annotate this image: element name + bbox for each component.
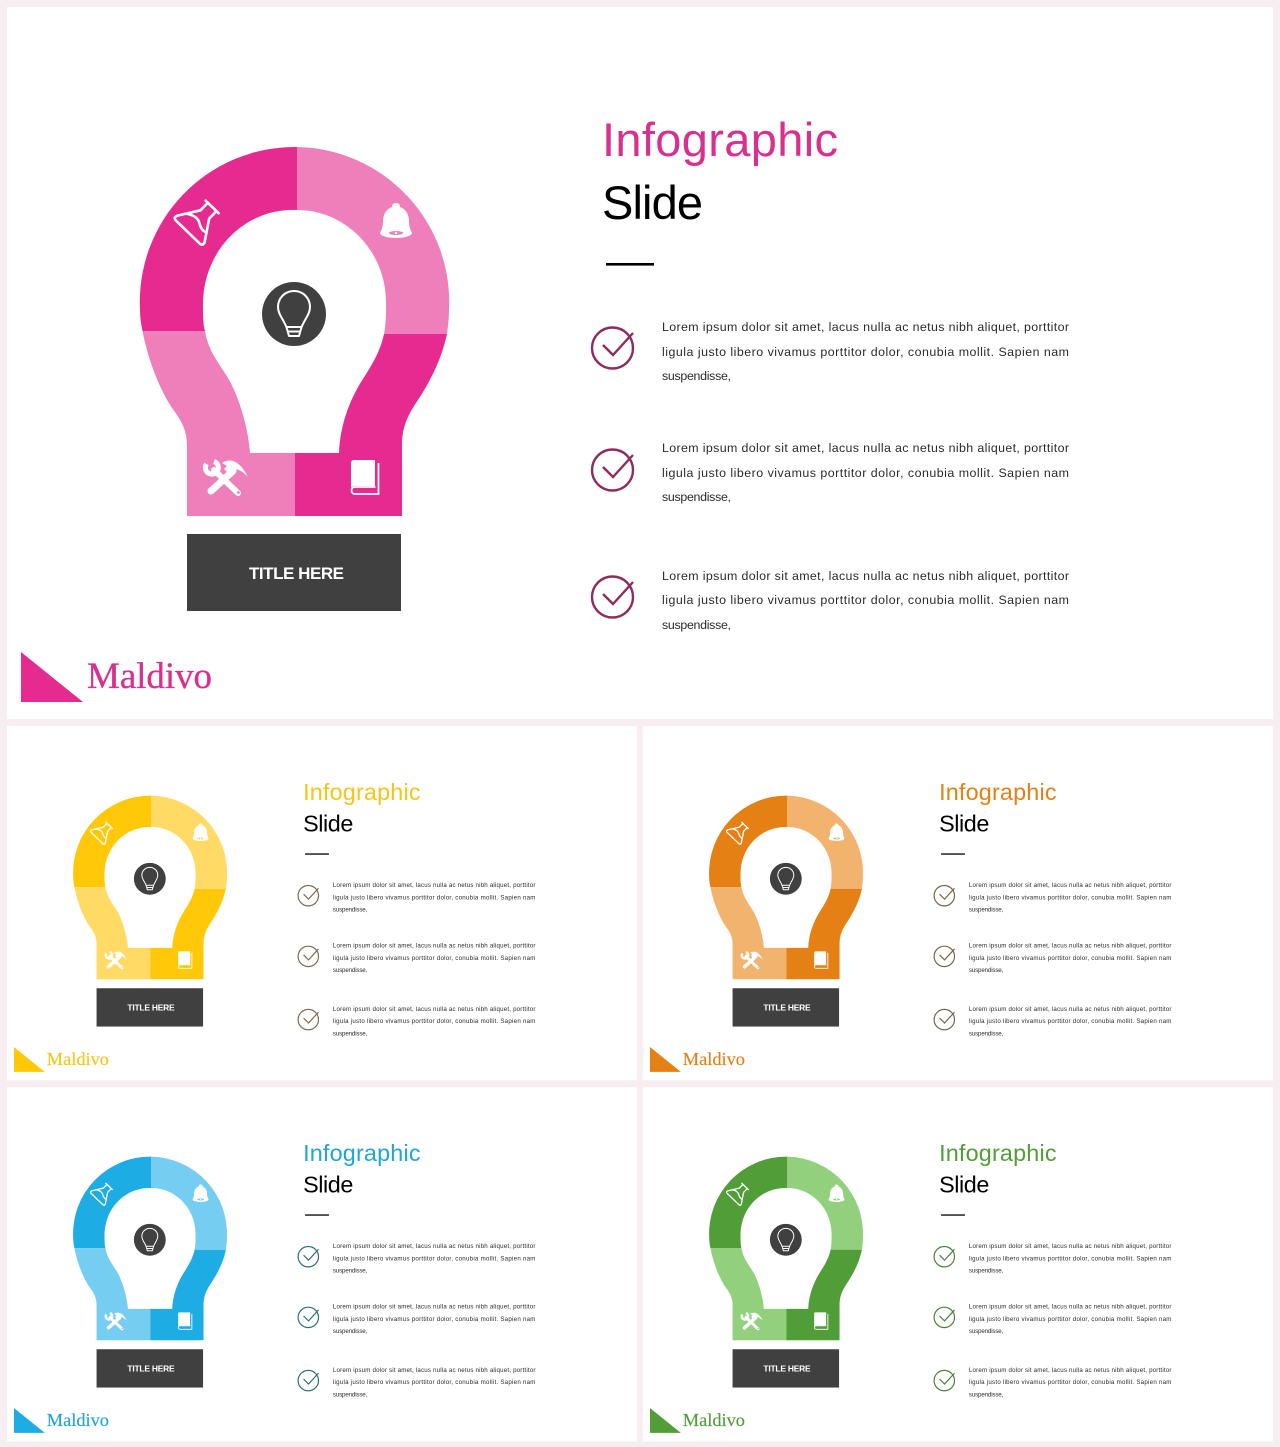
list item 3 [592, 569, 1069, 632]
heading rule [941, 1214, 965, 1216]
list item 3 [298, 1367, 535, 1399]
list item 1 [592, 320, 1069, 383]
heading: Slide: Slide [303, 810, 353, 836]
list item 3: suspendisse, [969, 1392, 1004, 1399]
list item 1 [934, 882, 1171, 914]
heading: Infographic: Infographic [939, 1140, 1057, 1166]
list item 1: suspendisse, [333, 907, 368, 914]
list item 3: suspendisse, [333, 1392, 368, 1399]
segment: bottom left [74, 887, 150, 979]
list item 2: ligula justo libero vivamus porttitor dolor, conubia mollit. Sapien nam [333, 955, 535, 962]
title box [187, 534, 401, 611]
segment: bottom left [142, 331, 295, 516]
list item 2: ligula justo libero vivamus porttitor dolor, conubia mollit. Sapien nam [969, 955, 1171, 962]
list item 1: suspendisse, [662, 369, 731, 383]
panel: yellow slide [7, 726, 637, 1080]
list item 3: ligula justo libero vivamus porttitor dolor, conubia mollit. Sapien nam [333, 1018, 535, 1025]
list item 1: suspendisse, [969, 1268, 1004, 1275]
list item 3 [298, 1006, 535, 1038]
bulb diagram [73, 796, 227, 979]
list item 1: ligula justo libero vivamus porttitor dolor, conubia mollit. Sapien nam [333, 895, 535, 902]
icon: flask [90, 819, 116, 845]
center circle [770, 1224, 802, 1256]
list item 1: Lorem ipsum dolor sit amet, lacus nulla ac netus nibh aliquet, porttitor [333, 882, 535, 889]
title box: TITLE HERE [763, 1003, 811, 1013]
list item 3: Lorem ipsum dolor sit amet, lacus nulla ac netus nibh aliquet, porttitor [662, 569, 1069, 583]
icon: flask [174, 193, 226, 246]
icon: tools [742, 952, 763, 968]
list item 1: Lorem ipsum dolor sit amet, lacus nulla ac netus nibh aliquet, porttitor [662, 320, 1069, 334]
title box [733, 1349, 839, 1388]
icon: bell [829, 824, 845, 841]
segment: bottom left [710, 887, 786, 979]
title box: TITLE HERE [249, 564, 344, 583]
list item 1: suspendisse, [333, 1268, 368, 1275]
icon: bell [380, 203, 412, 238]
list item 2: Lorem ipsum dolor sit amet, lacus nulla ac netus nibh aliquet, porttitor [969, 942, 1171, 949]
list item 3: suspendisse, [333, 1031, 368, 1038]
list item 2: suspendisse, [662, 490, 731, 504]
center circle [134, 863, 166, 895]
list item 3: Lorem ipsum dolor sit amet, lacus nulla ac netus nibh aliquet, porttitor [333, 1367, 535, 1374]
list item 3: Lorem ipsum dolor sit amet, lacus nulla ac netus nibh aliquet, porttitor [969, 1367, 1171, 1374]
segment: top right [151, 1157, 227, 1250]
list item 3: suspendisse, [662, 618, 731, 632]
center circle [770, 863, 802, 895]
list item 3: Lorem ipsum dolor sit amet, lacus nulla ac netus nibh aliquet, porttitor [333, 1006, 535, 1013]
logo [650, 1408, 745, 1433]
segment: top left [709, 796, 787, 887]
list item 2 [298, 1303, 535, 1335]
heading: Infographic: Infographic [303, 779, 421, 805]
segment: bottom right [295, 334, 447, 516]
logo [21, 652, 212, 702]
logo: Maldivo [683, 1410, 745, 1430]
icon: bell [829, 1185, 845, 1202]
icon: flask [90, 1180, 116, 1206]
segment: bottom left [710, 1248, 786, 1340]
title box: TITLE HERE [127, 1003, 175, 1013]
icon: book [178, 1312, 192, 1329]
list item 2: Lorem ipsum dolor sit amet, lacus nulla ac netus nibh aliquet, porttitor [969, 1303, 1171, 1310]
icon: book [351, 460, 378, 494]
logo [14, 1408, 109, 1433]
icon: flask [726, 1180, 752, 1206]
list item 1: Lorem ipsum dolor sit amet, lacus nulla ac netus nibh aliquet, porttitor [333, 1243, 535, 1250]
list item 2: suspendisse, [969, 967, 1004, 974]
list item 1 [298, 1243, 535, 1275]
center circle [134, 1224, 166, 1256]
segment: top right [787, 796, 863, 889]
icon: book [814, 1312, 828, 1329]
list item 2: ligula justo libero vivamus porttitor dolor, conubia mollit. Sapien nam [333, 1316, 535, 1323]
heading rule [305, 853, 329, 855]
logo: Maldivo [87, 656, 212, 697]
icon: book [178, 951, 192, 968]
segment: top left [73, 1157, 151, 1248]
panel: green slide [643, 1087, 1273, 1441]
heading: Slide: Slide [303, 1171, 353, 1197]
list item 1: Lorem ipsum dolor sit amet, lacus nulla ac netus nibh aliquet, porttitor [969, 882, 1171, 889]
list item 1: suspendisse, [969, 907, 1004, 914]
segment: bottom left [74, 1248, 150, 1340]
title box [733, 988, 839, 1027]
icon: light bulb [778, 1228, 794, 1251]
bulb diagram [140, 147, 449, 516]
icon: tools [742, 1313, 763, 1329]
list item 2: Lorem ipsum dolor sit amet, lacus nulla ac netus nibh aliquet, porttitor [662, 441, 1069, 455]
list item 2: ligula justo libero vivamus porttitor dolor, conubia mollit. Sapien nam [969, 1316, 1171, 1323]
logo: Maldivo [47, 1410, 109, 1430]
segment: top left [140, 147, 297, 331]
icon: light bulb [278, 291, 310, 336]
list item 2: ligula justo libero vivamus porttitor dolor, conubia mollit. Sapien nam [662, 466, 1069, 480]
icon: light bulb [142, 1228, 158, 1251]
list item 2: suspendisse, [969, 1328, 1004, 1335]
icon: tools [106, 952, 127, 968]
list item 2 [298, 942, 535, 974]
bulb diagram [73, 1157, 227, 1340]
center circle [262, 282, 326, 346]
segment: bottom right [150, 889, 226, 979]
list item 1: ligula justo libero vivamus porttitor dolor, conubia mollit. Sapien nam [969, 895, 1171, 902]
logo [14, 1047, 109, 1072]
icon: flask [726, 819, 752, 845]
heading: Slide: Slide [939, 1171, 989, 1197]
list item 2: Lorem ipsum dolor sit amet, lacus nulla ac netus nibh aliquet, porttitor [333, 1303, 535, 1310]
segment: top right [297, 147, 449, 334]
list item 2 [592, 441, 1069, 504]
panel: pink slide [7, 7, 1273, 719]
list item 3: suspendisse, [969, 1031, 1004, 1038]
segment: bottom right [786, 889, 862, 979]
heading rule [606, 263, 654, 266]
segment: top left [709, 1157, 787, 1248]
heading: Infographic: Infographic [939, 779, 1057, 805]
list item 2: suspendisse, [333, 967, 368, 974]
panel: orange slide [643, 726, 1273, 1080]
logo: Maldivo [47, 1049, 109, 1069]
list item 2 [934, 1303, 1171, 1335]
list item 3: ligula justo libero vivamus porttitor dolor, conubia mollit. Sapien nam [333, 1379, 535, 1386]
heading rule [305, 1214, 329, 1216]
icon: tools [205, 460, 248, 494]
icon: bell [193, 1185, 209, 1202]
heading: Infographic: Infographic [602, 113, 838, 166]
icon: book [814, 951, 828, 968]
list item 2: Lorem ipsum dolor sit amet, lacus nulla ac netus nibh aliquet, porttitor [333, 942, 535, 949]
heading: Slide: Slide [602, 176, 703, 229]
list item 2: suspendisse, [333, 1328, 368, 1335]
icon: light bulb [778, 867, 794, 890]
segment: top right [151, 796, 227, 889]
logo: Maldivo [683, 1049, 745, 1069]
list item 3: ligula justo libero vivamus porttitor dolor, conubia mollit. Sapien nam [969, 1379, 1171, 1386]
heading: Infographic: Infographic [303, 1140, 421, 1166]
segment: bottom right [786, 1250, 862, 1340]
list item 1 [298, 882, 535, 914]
bulb diagram [709, 1157, 863, 1340]
list item 3 [934, 1367, 1171, 1399]
list item 1: Lorem ipsum dolor sit amet, lacus nulla ac netus nibh aliquet, porttitor [969, 1243, 1171, 1250]
segment: top left [73, 796, 151, 887]
list item 3: ligula justo libero vivamus porttitor dolor, conubia mollit. Sapien nam [662, 593, 1069, 607]
list item 3 [934, 1006, 1171, 1038]
heading rule [941, 853, 965, 855]
list item 3: Lorem ipsum dolor sit amet, lacus nulla ac netus nibh aliquet, porttitor [969, 1006, 1171, 1013]
logo [650, 1047, 745, 1072]
title box: TITLE HERE [763, 1364, 811, 1374]
list item 2 [934, 942, 1171, 974]
icon: light bulb [142, 867, 158, 890]
list item 3: ligula justo libero vivamus porttitor dolor, conubia mollit. Sapien nam [969, 1018, 1171, 1025]
segment: top right [787, 1157, 863, 1250]
bulb diagram [709, 796, 863, 979]
list item 1 [934, 1243, 1171, 1275]
icon: tools [106, 1313, 127, 1329]
title box [97, 1349, 203, 1388]
title box: TITLE HERE [127, 1364, 175, 1374]
title box [97, 988, 203, 1027]
list item 1: ligula justo libero vivamus porttitor dolor, conubia mollit. Sapien nam [969, 1256, 1171, 1263]
icon: bell [193, 824, 209, 841]
heading: Slide: Slide [939, 810, 989, 836]
segment: bottom right [150, 1250, 226, 1340]
panel: blue slide [7, 1087, 637, 1441]
list item 1: ligula justo libero vivamus porttitor dolor, conubia mollit. Sapien nam [662, 345, 1069, 359]
list item 1: ligula justo libero vivamus porttitor dolor, conubia mollit. Sapien nam [333, 1256, 535, 1263]
